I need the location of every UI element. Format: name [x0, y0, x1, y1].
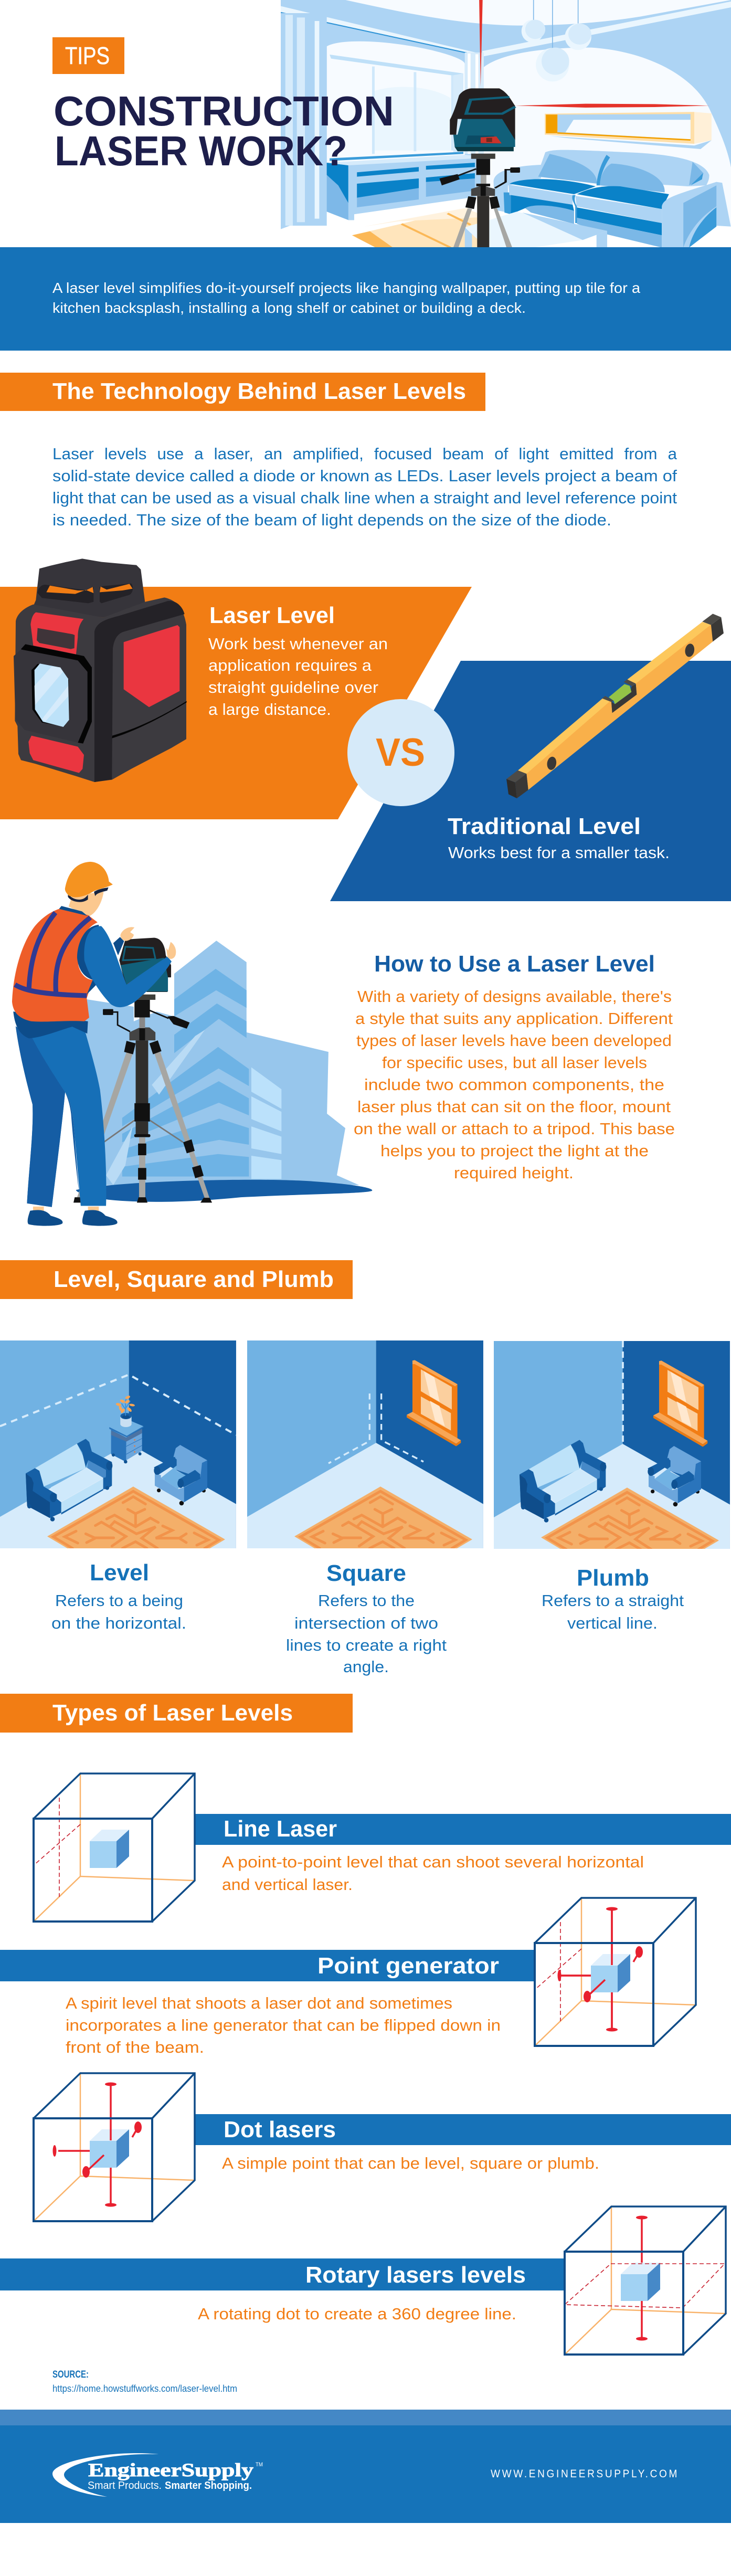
- band: dot lasers: [195, 2114, 731, 2145]
- text: how to use a laser level: a style that suits any application. Different: [355, 1009, 673, 1028]
- technology paragraph: is needed. The size of the beam of light depends on the size of the diode.: [52, 511, 611, 529]
- cabinet: [327, 155, 476, 220]
- tag: tips: [52, 37, 124, 74]
- icon: dot lasers box: [34, 2073, 195, 2221]
- text: traditional level: Works best for a smaller task.: [448, 843, 670, 862]
- logo: EngineerSupply: [52, 2453, 263, 2497]
- text: laser level: application requires a: [208, 656, 372, 674]
- caption: square: lines to create a right: [286, 1636, 447, 1654]
- text: how to use a laser level: include two common components, the: [364, 1075, 664, 1094]
- source: [52, 2369, 237, 2394]
- text: point generator: front of the beam.: [66, 2038, 204, 2056]
- intro band: A laser level simplifies do-it-yourself projects like hanging wallpaper, putting up tile for a: [52, 280, 640, 296]
- caption: level: [51, 1560, 186, 1632]
- panel: laser level: [0, 587, 472, 819]
- text: point generator: [66, 1994, 501, 2056]
- section heading: types of laser levels: [0, 1694, 353, 1733]
- technology paragraph: [52, 445, 677, 529]
- section heading: technology: [0, 373, 485, 411]
- text: line laser: A point-to-point level that can shoot several horizontal: [222, 1853, 644, 1871]
- text: dot lasers: A simple point that can be level, square or plumb.: [222, 2154, 599, 2172]
- band: line laser: [195, 1814, 731, 1845]
- caption: plumb: Plumb: [577, 1565, 649, 1591]
- illustration: worker using laser level with buildings: [12, 862, 372, 1226]
- text: how to use a laser level: for specific uses, but all laser levels: [382, 1053, 647, 1072]
- text: how to use a laser level: With a variety of designs available, there's: [357, 987, 672, 1006]
- icon: line laser box: [34, 1773, 195, 1922]
- title: [54, 88, 394, 174]
- band: point generator: Point generator: [317, 1953, 499, 1979]
- section heading: level, square and plumb: [0, 1260, 353, 1299]
- technology paragraph: solid-state device called a diode or known as LEDs. Laser levels project a beam of: [52, 467, 677, 485]
- text: how to use a laser level: on the wall or attach to a tripod. This base: [354, 1120, 675, 1138]
- caption: square: Refers to the: [318, 1591, 415, 1610]
- title: LASER WORK?: [55, 128, 347, 174]
- text: line laser: and vertical laser.: [222, 1875, 353, 1894]
- text: point generator: A spirit level that shoots a laser dot and sometimes: [66, 1994, 452, 2012]
- caption: square: [286, 1560, 447, 1676]
- laser device on tripod: [119, 938, 171, 992]
- icon: point generator box: [535, 1898, 696, 2046]
- nightstand with plant: [109, 1395, 143, 1463]
- band: dot lasers: Dot lasers: [224, 2117, 336, 2142]
- caption: square: angle.: [343, 1657, 389, 1676]
- section heading: level, square and plumb: Level, Square and Plumb: [54, 1266, 334, 1292]
- logo: EngineerSupply: Smart Products.: [88, 2480, 162, 2491]
- technology paragraph: light that can be used as a visual chalk line when a straight and level reference point: [52, 489, 677, 507]
- section heading: types of laser levels: Types of Laser Levels: [52, 1700, 293, 1726]
- caption: level: Refers to a being: [55, 1591, 183, 1610]
- source: https://home.howstuffworks.com/laser-level.htm: [52, 2383, 237, 2394]
- icon: rotary laser box: [565, 2207, 726, 2355]
- text: line laser: [222, 1853, 644, 1894]
- caption: plumb: Refers to a straight: [542, 1591, 684, 1610]
- text: laser level: [208, 635, 388, 719]
- logo: EngineerSupply: Smarter Shopping.: [165, 2480, 252, 2491]
- coffee table: [465, 212, 607, 248]
- hero illustration: living room with laser level on tripod: [281, 0, 731, 248]
- title: CONSTRUCTION: [54, 88, 394, 134]
- text: laser level: straight guideline over: [208, 678, 378, 696]
- icon: traditional spirit level: [506, 614, 724, 798]
- band: line laser: Line Laser: [224, 1816, 337, 1842]
- website url: WWW.ENGINEERSUPPLY.COM: [491, 2468, 679, 2480]
- logo: EngineerSupply: EngineerSupply: [88, 2459, 253, 2480]
- text: how to use a laser level: required height.: [454, 1164, 574, 1182]
- heading: traditional level: Traditional Level: [448, 814, 641, 839]
- text: how to use a laser level: [354, 987, 675, 1182]
- caption: plumb: vertical line.: [567, 1614, 658, 1632]
- intro band: [0, 247, 731, 351]
- badge: vs: VS: [376, 730, 425, 774]
- tripod: [439, 154, 520, 248]
- caption: level: on the horizontal.: [51, 1614, 186, 1632]
- intro band: kitchen backsplash, installing a long shelf or cabinet or building a deck.: [52, 300, 526, 316]
- text: laser level: a large distance.: [208, 700, 331, 719]
- text: how to use a laser level: helps you to project the light at the: [380, 1142, 649, 1160]
- source: SOURCE:: [52, 2369, 89, 2380]
- red laser beams: [479, 0, 710, 108]
- text: how to use a laser level: types of laser levels have been developed: [356, 1031, 672, 1050]
- text: point generator: incorporates a line generator that can be flipped down in: [66, 2016, 501, 2034]
- band: rotary lasers levels: Rotary lasers levels: [305, 2262, 526, 2288]
- curtains: [281, 13, 327, 226]
- panel: level room: [0, 1340, 236, 1548]
- caption: square: intersection of two: [294, 1614, 438, 1632]
- heading: laser level: Laser Level: [209, 603, 335, 628]
- icon: red laser level device: [14, 558, 187, 782]
- panel: traditional level: [330, 661, 731, 901]
- logo: EngineerSupply: TM: [256, 2462, 263, 2468]
- band: rotary lasers levels: [0, 2258, 565, 2290]
- text: how to use a laser level: laser plus that can sit on the floor, mount: [357, 1097, 671, 1116]
- technology paragraph: Laser levels use a laser, an amplified, focused beam of light emitted from a: [52, 445, 677, 463]
- text: laser level: Work best whenever an: [208, 635, 388, 653]
- worker: [12, 862, 176, 1226]
- shelf: [545, 112, 712, 149]
- text: rotary lasers levels: A rotating dot to create a 360 degree line.: [198, 2305, 516, 2323]
- badge: vs: [347, 699, 454, 806]
- heading: how to use a laser level: How to Use a Laser Level: [374, 951, 655, 977]
- caption: level: Level: [90, 1560, 149, 1586]
- caption: plumb: [542, 1565, 684, 1632]
- sofa: [494, 150, 731, 248]
- buildings: [72, 941, 372, 1202]
- tripod: [73, 995, 212, 1202]
- caption: square: Square: [326, 1560, 406, 1586]
- laser level device: [450, 88, 515, 151]
- tag: tips: TIPS: [65, 42, 110, 69]
- band: point generator: [0, 1950, 535, 1981]
- panel: square room: [247, 1340, 483, 1548]
- footer band: [0, 2410, 731, 2523]
- hanging lamps: [522, 0, 591, 81]
- section heading: technology: The Technology Behind Laser Levels: [52, 378, 466, 404]
- rug: [352, 208, 478, 247]
- panel: plumb room: [494, 1341, 730, 1549]
